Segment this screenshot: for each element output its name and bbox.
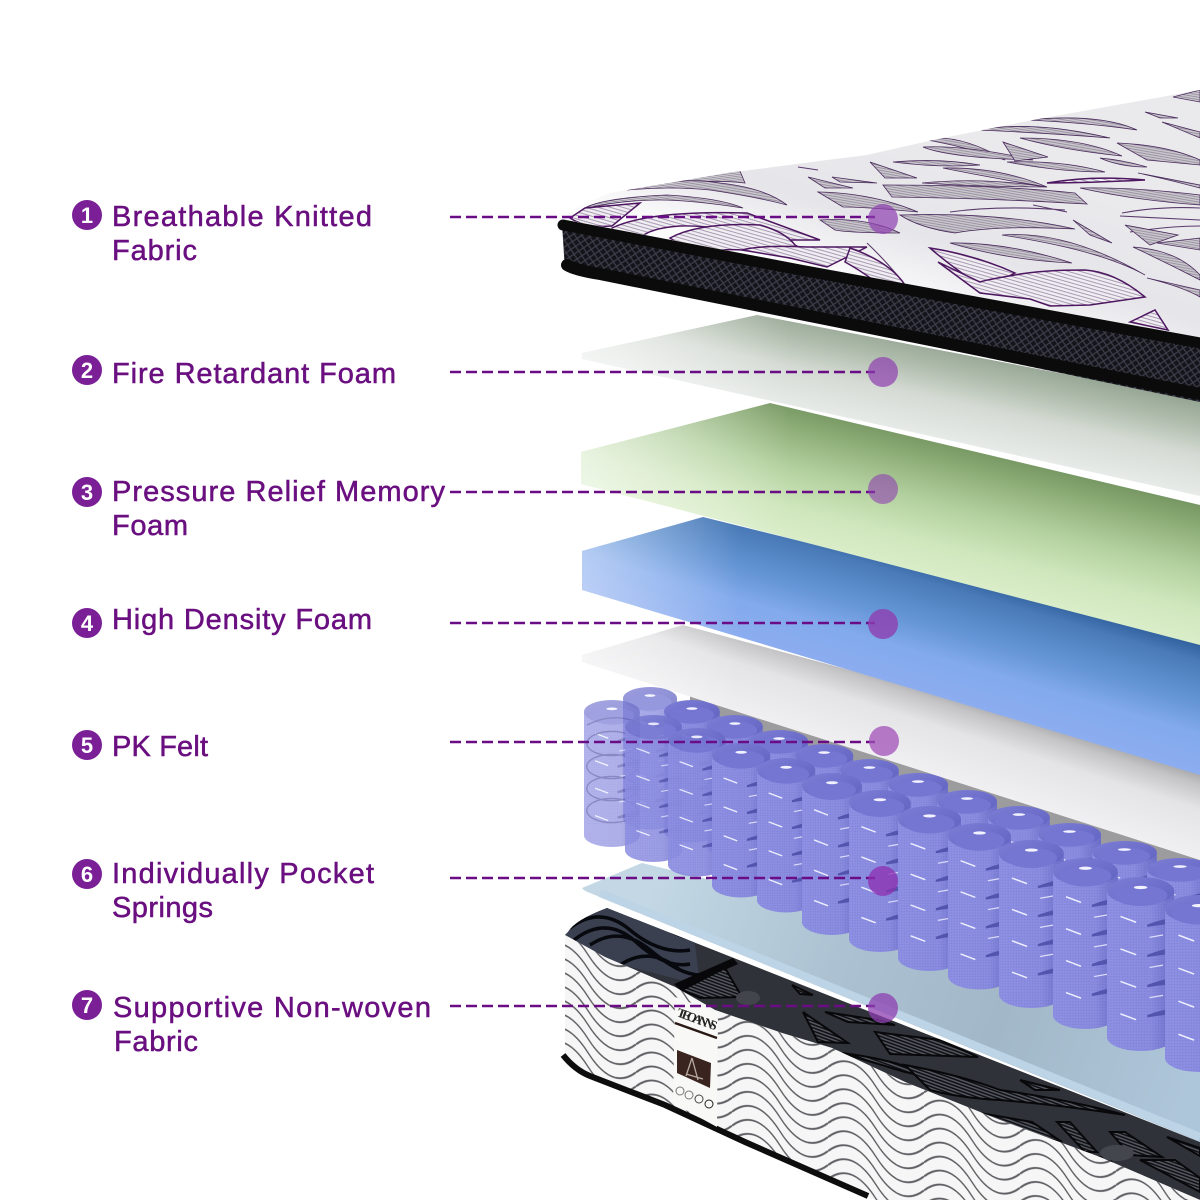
layer 5: PK felt xyxy=(582,625,1200,860)
layer 1: top mattress with breathable knitted fabric xyxy=(562,90,1200,402)
label 7: Supportive Non-woven Fabric xyxy=(72,990,431,1058)
label 2: Fire Retardant Foam xyxy=(72,355,396,390)
layer 2: fire retardant foam xyxy=(582,315,1200,496)
dark top surface xyxy=(560,899,1200,1200)
mesh side band xyxy=(562,224,1200,402)
label 4: High Density Foam xyxy=(72,604,372,638)
callout 6 xyxy=(450,866,898,896)
connector line 2 xyxy=(450,371,875,373)
marker dot 5 xyxy=(869,726,899,756)
label text 7: Fabric xyxy=(114,1026,198,1058)
connector line 5 xyxy=(450,741,875,743)
number badge 2: 2 xyxy=(81,358,93,383)
connector line 7 xyxy=(450,1005,875,1007)
marker dot 3 xyxy=(868,474,898,504)
number badge 3: 3 xyxy=(81,480,93,505)
label text 4: High Density Foam xyxy=(112,604,372,636)
number badge 7: 7 xyxy=(81,993,93,1018)
label text 5: PK Felt xyxy=(112,731,208,763)
connector line 3 xyxy=(450,491,875,493)
layer 4: high density foam xyxy=(582,517,1200,775)
label text 3: Pressure Relief Memory xyxy=(112,476,446,508)
number badge 6: 6 xyxy=(81,862,93,887)
number badge 1 xyxy=(72,200,102,230)
label text 6: Springs xyxy=(112,892,213,924)
number badge 1: 1 xyxy=(81,203,93,228)
marker dot 4 xyxy=(868,609,898,639)
front row of springs xyxy=(625,715,1200,1072)
label 1: Breathable Knitted Fabric xyxy=(72,200,372,267)
label text 1: Fabric xyxy=(112,235,197,267)
number badge 5: 5 xyxy=(81,733,93,758)
label text 6: Individually Pocket xyxy=(112,858,374,890)
knitted top surface xyxy=(562,90,1200,340)
layer 6: individually pocket springs xyxy=(584,687,1200,1072)
layer 3: pressure relief memory foam xyxy=(581,403,1200,645)
number badge 7 xyxy=(72,990,102,1020)
brand label card xyxy=(673,997,720,1127)
number badge 4: 4 xyxy=(81,611,94,636)
marker dot 6 xyxy=(868,866,898,896)
layer 6 base: light blue support plate xyxy=(582,694,1200,1142)
label 5: PK Felt xyxy=(72,730,208,763)
brand label card: TEOANNS xyxy=(675,1005,720,1033)
marker dot 2 xyxy=(868,357,898,387)
number badge 2 xyxy=(72,355,102,385)
label 6: Individually Pocket Springs xyxy=(72,858,374,924)
number badge 4 xyxy=(72,608,102,638)
number badge 3 xyxy=(72,477,102,507)
callout 3 xyxy=(450,474,898,504)
marker dot 1 xyxy=(868,204,898,234)
number badge 6 xyxy=(72,859,102,889)
connector line 4 xyxy=(450,622,875,624)
back row of spring tops xyxy=(623,687,1200,1000)
layer 7: bottom mattress with supportive non-woven fabric xyxy=(560,899,1200,1200)
translucent first spring xyxy=(584,700,640,847)
callout 1 xyxy=(450,204,898,234)
callout 2 xyxy=(450,357,898,387)
black piping xyxy=(563,225,1200,343)
connector line 1 xyxy=(450,216,875,218)
callout 7 xyxy=(450,993,898,1023)
marker dot 7 xyxy=(868,993,898,1023)
callout 4 xyxy=(450,609,898,639)
label text 3: Foam xyxy=(112,510,188,542)
callout 5 xyxy=(450,726,899,756)
wavy quilted side xyxy=(563,935,1200,1200)
connector line 6 xyxy=(450,877,875,879)
label text 2: Fire Retardant Foam xyxy=(112,358,396,390)
label 3: Pressure Relief Memory Foam xyxy=(72,476,446,542)
label text 7: Supportive Non-woven xyxy=(113,992,431,1024)
label text 1: Breathable Knitted xyxy=(112,201,372,233)
